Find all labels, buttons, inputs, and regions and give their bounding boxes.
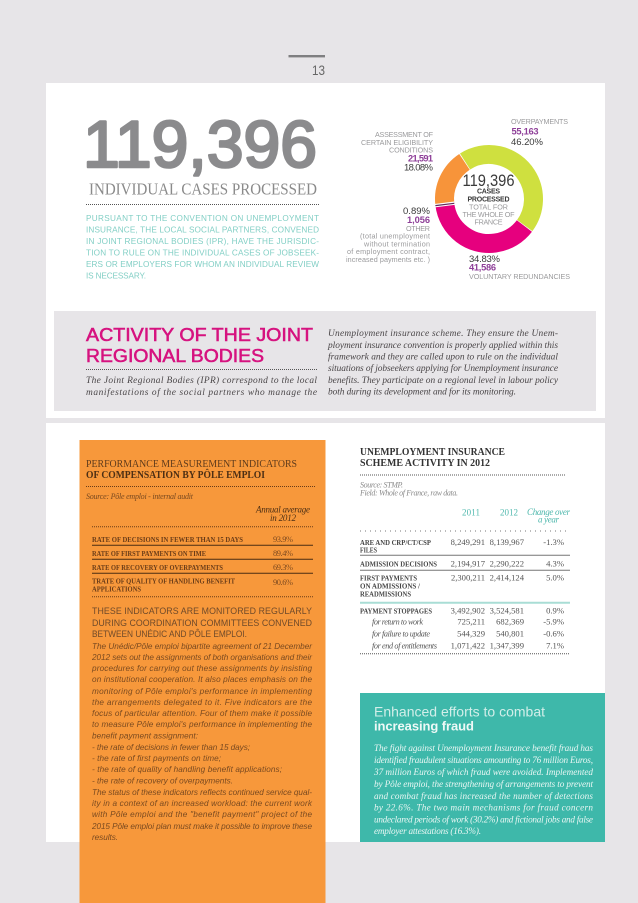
row: for failure to update: for failure to update	[372, 630, 430, 639]
source note: Source: Pôle emploi - internal audit	[86, 492, 194, 501]
donut centre label: CASES	[477, 188, 500, 196]
label: other: 1,056	[407, 215, 430, 225]
row: payment stoppages	[360, 605, 564, 615]
row: admission decisions: 2,290,222	[490, 559, 524, 569]
row: for end of entitlements: for end of entitlements	[372, 642, 437, 651]
row: payment stoppages: 3,524,581	[490, 605, 524, 615]
italic paragraph: procedures for carrying out these assignments by insisting	[91, 664, 312, 673]
row: first payments: ON ADMISSIONS /	[360, 582, 421, 591]
row: for return to work: 725,211	[457, 617, 485, 627]
label: overpayments: OVERPAYMENTS	[511, 117, 568, 126]
label: assessment of eligibility: ASSESSMENT OF	[375, 130, 434, 139]
fraud heading: Enhanced efforts to combat	[374, 704, 545, 720]
row: first payments: 2,300,211	[451, 573, 485, 583]
row: first payments: FIRST PAYMENTS	[360, 574, 417, 583]
panel heading: OF COMPENSATION BY PÔLE EMPLOI	[86, 468, 265, 481]
row: for end of entitlements: 7.1%	[546, 641, 564, 651]
band: activity of the joint regional bodies	[54, 311, 596, 411]
intro text: ERS OR EMPLOYERS FOR WHOM AN INDIVIDUAL REVIEW	[86, 260, 319, 269]
section heading	[86, 325, 313, 366]
italic paragraph: - the rate of recovery of overpayments.	[92, 777, 233, 786]
italic paragraph: ity in a context of an increased workload: the current work	[92, 799, 313, 808]
fraud text: 37 million Euros of which fraud were avoided. Implemented	[373, 767, 593, 777]
label: assessment of eligibility	[361, 130, 434, 174]
label: other: (total unemployment	[360, 232, 430, 240]
intro text	[86, 214, 319, 280]
label: assessment of eligibility: CONDITIONS	[389, 146, 433, 154]
section heading: ACTIVITY OF THE JOINT	[86, 325, 313, 345]
row: for return to work	[372, 617, 564, 627]
row: payment stoppages: 3,492,902	[451, 605, 485, 615]
indicator table: 69.3%	[273, 563, 293, 572]
table source	[359, 481, 458, 498]
italic paragraph: the arrangements delegated to it. Five indicators are the	[92, 698, 312, 707]
column header: in 2012	[270, 513, 296, 523]
table heading	[360, 447, 505, 469]
table source: Field: Whole of France, raw data.	[359, 489, 458, 498]
label: voluntary redundancies: 34.83%	[469, 254, 501, 265]
fraud text: by Pôle emploi, the strengthening of arrangements to prevent	[374, 779, 593, 789]
page number	[288, 55, 325, 78]
band text left: manifestations of the social partners who manage the	[86, 387, 317, 398]
row: are and crp files: -1.3%	[543, 537, 564, 547]
row: payment stoppages: 0.9%	[546, 605, 564, 615]
row: are and crp files: 8,139,967	[490, 537, 525, 547]
italic paragraph: - the rate of first payments on time;	[92, 754, 221, 763]
indicator table: 93.9%	[273, 535, 293, 544]
italic paragraph: 2012 sets out the assignments of both organisations and their	[91, 653, 312, 662]
italic paragraph: results.	[92, 833, 118, 842]
italic paragraph: to measure Pôle emploi's performance in implementing the	[92, 720, 312, 729]
row: first payments: READMISSIONS	[360, 590, 411, 599]
row: for end of entitlements	[372, 641, 564, 651]
intro text: TION TO RULE ON THE INDIVIDUAL CASES OF JOBSEEK-	[86, 248, 319, 258]
band text right: situations of jobseekers applying for Unemployment insurance	[328, 363, 558, 374]
fraud heading	[374, 704, 545, 734]
band text right: both during its development and for its monitoring.	[328, 386, 516, 398]
section heading: REGIONAL BODIES	[86, 346, 264, 366]
caps paragraph: THESE INDICATORS ARE MONITORED REGULARLY	[92, 606, 312, 616]
intro text: IS NECESSARY.	[86, 272, 146, 280]
row: for return to work: -5.9%	[543, 617, 564, 627]
fraud text: The fight against Unemployment Insurance benefit fraud has	[374, 743, 593, 753]
label: other: 0.89%	[403, 206, 431, 217]
intro text: INSURANCE, THE LOCAL SOCIAL PARTNERS, CONVENED	[86, 226, 319, 234]
fraud text: and combat fraud has increased the number of detections	[374, 791, 593, 801]
indicator table: RATE OF RECOVERY OF OVERPAYMENTS	[92, 563, 223, 572]
italic paragraph: 2015 Pôle emploi plan must make it possible to improve these	[91, 822, 312, 831]
label: assessment of eligibility: 18.08%	[404, 162, 434, 174]
indicator table: 89.4%	[273, 549, 293, 558]
label: voluntary redundancies: VOLUNTARY REDUNDANCIES	[469, 272, 570, 281]
italic paragraph: on institutional cooperation. It also places emphasis on the	[92, 675, 312, 684]
table header: a year	[538, 515, 559, 525]
row: first payments: 2,414,124	[490, 573, 525, 583]
donut centre label: FRANCE	[474, 218, 503, 227]
panel: cases processed	[46, 83, 605, 418]
label: overpayments: 55,163	[512, 126, 538, 136]
panel: enhanced efforts against fraud	[360, 693, 605, 842]
italic paragraph: The status of these indicators reflects continued service qual-	[92, 788, 312, 797]
column header: Annual average	[255, 505, 310, 515]
label: other: increased payments etc. )	[346, 255, 430, 264]
row: for return to work: for return to work	[372, 618, 423, 627]
indicator table: RATE OF FIRST PAYMENTS ON TIME	[92, 549, 206, 558]
italic paragraph: The Unédic/Pôle emploi bipartite agreement of 21 December	[92, 642, 312, 651]
caps paragraph: DURING COORDINATION COMMITTEES CONVENED	[92, 618, 312, 628]
band text right: framework and they are called upon to rule on the individual	[328, 352, 558, 362]
donut chart	[427, 137, 551, 261]
indicator table: RATE OF DECISIONS IN FEWER THAN 15 DAYS	[92, 535, 243, 544]
intro text: PURSUANT TO THE CONVENTION ON UNEMPLOYMENT	[86, 214, 319, 223]
panel: scheme activity table	[359, 447, 570, 654]
subheading: INDIVIDUAL CASES PROCESSED	[89, 180, 317, 198]
table header: Change over	[527, 507, 570, 517]
row: first payments	[360, 573, 564, 599]
table heading: SCHEME ACTIVITY IN 2012	[360, 458, 490, 469]
band text right: Unemployment insurance scheme. They ensure the Unem-	[328, 329, 558, 339]
panel heading: PERFORMANCE MEASUREMENT INDICATORS	[86, 459, 297, 470]
row: admission decisions: ADMISSION DECISIONS	[360, 560, 437, 569]
donut centre label: TOTAL FOR	[469, 202, 508, 211]
band text left: The Joint Regional Bodies (IPR) correspond to the local	[86, 375, 317, 386]
row: payment stoppages: PAYMENT STOPPAGES	[360, 606, 432, 615]
row: for failure to update: -0.6%	[543, 629, 564, 639]
donut centre label: 119,396	[462, 172, 514, 190]
fraud text: undeclared periods of work (30.2%) and fictional jobs and false	[374, 814, 593, 824]
donut centre label: THE WHOLE OF	[462, 210, 515, 219]
row: for failure to update	[372, 629, 564, 639]
label: other: OTHER	[406, 224, 430, 233]
panel heading	[86, 459, 297, 481]
page number: 13	[312, 62, 325, 78]
panel: lower white	[46, 423, 605, 842]
row: for end of entitlements: 1,347,399	[490, 641, 524, 651]
indicator table: TRATE OF QUALITY OF HANDLING BENEFIT	[92, 577, 235, 586]
column header	[255, 505, 310, 523]
panel: performance indicators	[80, 440, 326, 903]
row: are and crp files: 8,249,291	[451, 537, 485, 547]
row: for failure to update: 544,329	[457, 629, 485, 639]
italic paragraph: focus of particular attention. Four of them make it possible	[92, 709, 312, 718]
row: for end of entitlements: 1,071,422	[451, 641, 485, 651]
fraud text: employer attestations (16.3%).	[374, 826, 481, 836]
row: are and crp files: ARE AND CRP/CT/CSP	[360, 538, 431, 547]
label: other: of employment contract,	[347, 247, 430, 256]
row: are and crp files: FILES	[360, 546, 377, 555]
table source: Source: STMP.	[360, 481, 403, 490]
label: voluntary redundancies	[469, 254, 570, 281]
intro text: IN JOINT REGIONAL BODIES (IPR), HAVE THE JURISDIC-	[86, 237, 319, 246]
table header: 2011	[462, 508, 480, 518]
row: first payments: 5.0%	[546, 573, 564, 583]
indicator table	[92, 535, 313, 594]
table heading: UNEMPLOYMENT INSURANCE	[360, 447, 505, 458]
table header: 2012	[500, 508, 518, 518]
label: assessment of eligibility: 21,591	[408, 154, 433, 164]
donut centre label	[462, 172, 515, 227]
fraud text	[373, 743, 593, 836]
donut centre label: PROCESSED	[468, 196, 510, 204]
label: other	[346, 206, 431, 264]
fraud text: by 22.6%. The two main mechanisms for fraud concern	[374, 802, 593, 812]
label: assessment of eligibility: CERTAIN ELIGIBILITY	[361, 138, 433, 147]
band text left	[86, 375, 317, 398]
band text right: ployment insurance convention is properly applied within this	[327, 341, 558, 351]
row: admission decisions: 2,194,917	[451, 559, 486, 569]
italic paragraph: - the rate of decisions in fewer than 15 days;	[92, 743, 250, 752]
italic paragraph	[91, 642, 313, 842]
fraud text: identified fraudulent situations amounting to 76 million Euros,	[374, 755, 593, 765]
row: admission decisions: 4.3%	[546, 559, 564, 569]
row: admission decisions	[360, 559, 564, 569]
label: other: without termination	[363, 240, 430, 248]
italic paragraph: monitoring of Pôle emploi's performance in implementing	[92, 687, 312, 696]
row: are and crp files	[360, 537, 564, 555]
caps paragraph: BETWEEN UNÉDIC AND PÔLE EMPLOI.	[92, 629, 247, 639]
italic paragraph: benefit payment assignment:	[92, 732, 198, 741]
indicator table: 90.6%	[273, 578, 293, 587]
italic paragraph: - the rate of quality of handling benefit applications;	[92, 765, 282, 774]
table header	[462, 507, 570, 525]
big number: 119,396	[83, 107, 317, 181]
label: overpayments: 46.20%	[511, 137, 544, 148]
label: voluntary redundancies: 41,586	[469, 262, 496, 272]
italic paragraph: with Pôle emploi and the "benefit payment" project of the	[92, 810, 312, 819]
indicator table: APPLICATIONS	[92, 585, 141, 594]
row: for failure to update: 540,801	[496, 629, 524, 639]
caps paragraph	[92, 606, 312, 639]
band text right	[327, 329, 559, 398]
fraud heading: increasing fraud	[374, 719, 474, 734]
row: for return to work: 682,369	[496, 617, 524, 627]
band text right: benefits. They participate on a regional level in labour policy	[328, 375, 559, 386]
label: overpayments	[511, 117, 568, 148]
